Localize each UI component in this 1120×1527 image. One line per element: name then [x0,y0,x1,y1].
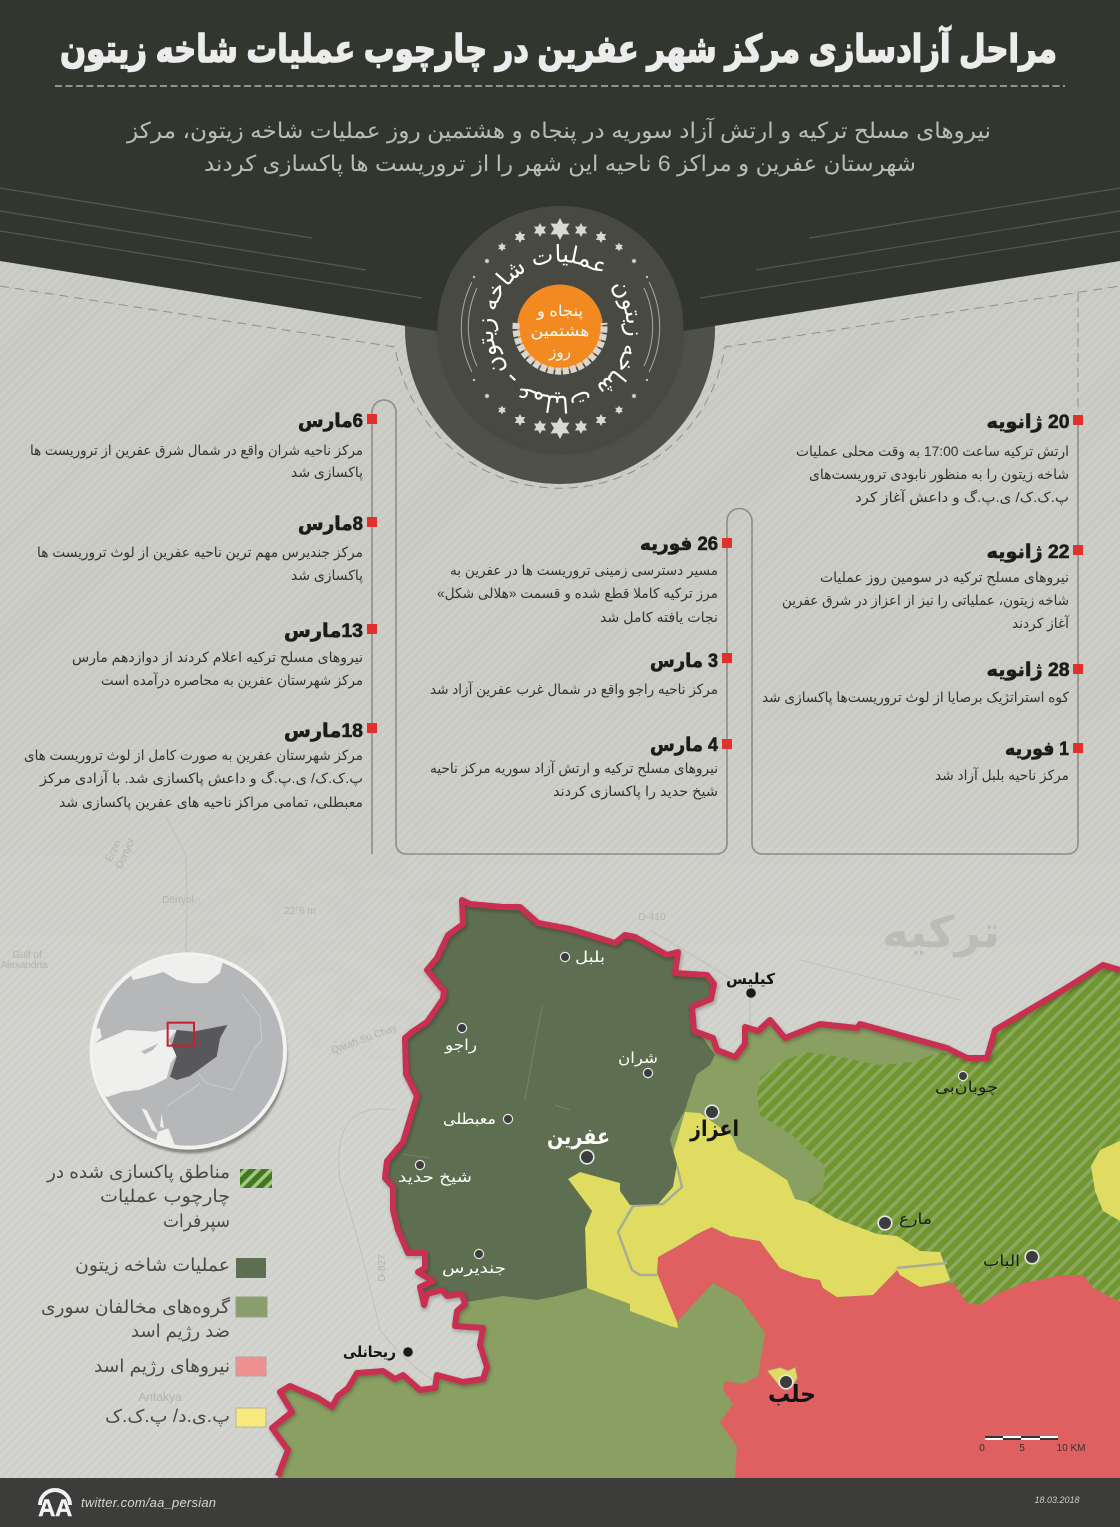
legend: YPG: پ.ی.د/ پ.ک.ک [105,1406,230,1427]
orange center text [530,303,590,361]
timeline column: right [762,412,1070,784]
faint base-map labels and roads [0,815,960,1404]
legend: olive branch [75,1255,266,1278]
footer date: 18.03.2018 [1034,1495,1080,1505]
timeline column: left: پاکسازی شد [291,567,363,584]
scale bar: 10 KM [1057,1443,1085,1454]
city labels [343,949,1020,1408]
agency logo: AA [38,1495,72,1522]
footer [0,1478,1120,1527]
timeline column: right: شاخه زیتون را به منظور نابودی تروریست‌های [809,466,1069,483]
sea mediterranean [87,1028,177,1097]
subtitle [126,117,991,177]
timeline column: right: ارتش ترکیه ساعت 17:00 به وقت محلی عملیات [796,443,1069,460]
faint base-map labels and roads: Gulf of [12,950,42,961]
timeline column: middle: شیخ حدید را پاکسازی کردند [553,783,718,800]
subtitle: نیروهای مسلح ترکیه و ارتش آزاد سوریه در پنجاه و هشتمین روز عملیات شاخه زیتون، مرکز [126,117,991,144]
city labels: بلبل [575,949,605,966]
timeline brackets [372,400,1078,854]
timeline column: left: مرکز جندیرس مهم ترین ناحیه عفرین از لوث تروریست ها [37,544,363,561]
red timeline markers [367,414,1083,753]
city labels: حلب [768,1381,816,1408]
scale bar: 0 [979,1443,985,1454]
legend: opposition: ضد رژیم اسد [131,1321,230,1342]
regime area [657,1227,1120,1478]
legend: cleared area: چارچوب عملیات [100,1186,230,1207]
subtitle: شهرستان عفرین و مراکز 6 ناحیه این شهر را از تروریست ها پاکسازی کردند [204,151,916,177]
city labels: الباب [983,1253,1020,1270]
timeline column: middle: مسیر دسترسی زمینی تروریست ها در عفرین به [450,562,718,579]
timeline column: middle: 3 مارس [650,651,718,672]
opposition area [272,900,1120,1478]
footer link: twitter.com/aa_persian [81,1495,216,1510]
faint base-map labels and roads: Qarah Su Chay [330,1023,398,1057]
timeline column: left: معبطلی، تمامی مراکز ناحیه های عفرین پاکسازی شد [59,794,363,811]
border line [272,900,1120,1476]
rivers [618,1166,947,1275]
city labels: اعزاز [689,1116,739,1142]
cleared area hatch [757,965,1120,1305]
lighter map zone [0,700,1120,1480]
Syria [170,1025,227,1080]
faint base-map labels and roads: Erzin [104,838,124,864]
city markers [403,952,1039,1389]
locator box [168,1023,194,1046]
timeline column: middle: 26 فوریه [640,534,718,555]
timeline column: left [24,411,363,811]
timeline column: right: آغاز کردند [1012,615,1070,632]
timeline column: right: 1 فوریه [1005,739,1069,760]
timeline column: right: 20 ژانویه [986,412,1070,433]
timeline column: middle: نیروهای مسلح ترکیه و ارتش آزاد سوریه مرکز ناحیه [430,760,718,777]
timeline column: left: 8مارس [298,514,363,535]
YPG enclave Aleppo [768,1368,797,1386]
Cyprus [141,1043,158,1054]
timeline column: middle: مرکز ناحیه راجو واقع در شمال غرب عفرین آزاد شد [430,681,718,698]
timeline column: left: مرکز شهرستان عفرین به صورت کامل از لوث تروریست های [24,747,363,764]
timeline column: right: شاخه زیتون، عملیاتی را نیز از اعزاز در شرق عفرین [782,592,1069,609]
dashed guide lines [0,286,1120,488]
faint base-map labels and roads: Dortyol [114,837,137,871]
city labels: جندیرس [442,1260,506,1277]
Afrin inner roads [402,1006,570,1158]
city labels: مارع [899,1211,932,1228]
badge arcs [461,282,660,372]
city labels: معبطلی [443,1111,496,1128]
title divider [55,85,1065,87]
timeline column: right: مرکز ناحیه بلبل آزاد شد [935,767,1069,784]
legend: regime: نیروهای رژیم اسد [94,1356,230,1377]
outer dark disc [405,174,715,484]
timeline column: middle: نجات یافته کامل شد [600,609,718,625]
timeline column: left: 6مارس [298,411,363,432]
orange center text: هشتمین [530,323,590,340]
timeline column: left: نیروهای مسلح ترکیه اعلام کردند از دوازدهم مارس [72,649,363,666]
country label: Turkey: ترکیه [882,908,1000,958]
timeline column: left: پ.ک.ک/ ی.پ.گ و داعش پاکسازی شد. با آزادی مرکز [39,769,363,787]
city labels: راجو [444,1037,477,1054]
timeline column: right: کوه استراتژیک برصایا از لوث تروریست‌ها پاکسازی شد [762,689,1069,706]
badge stars [473,218,648,439]
orange center text: پنجاه و [536,303,583,321]
orange center [517,284,603,370]
faint base-map labels and roads: D-410 [638,912,666,923]
timeline column: middle [430,534,718,800]
map of Afrin region [272,900,1120,1478]
city labels: شران [618,1050,658,1067]
scale bar: 5 [1019,1443,1025,1454]
border shadow [273,902,1120,1478]
timeline column: left: 13مارس [284,621,363,642]
faint base-map labels and roads: 22°6 m [284,906,316,917]
orange center text: روز [548,344,571,361]
city labels: شیخ حدید [398,1169,472,1186]
sea north [131,956,222,984]
timeline column: left: مرکز ناحیه شران واقع در شمال شرق عفرین از تروریست ها [30,442,363,459]
legend: cleared area: سپرفرات [163,1211,230,1232]
borders [167,993,262,1107]
city labels: کیلیس [726,971,775,988]
Red Sea gulfs [142,1108,174,1144]
timeline column: left: مرکز شهرستان عفرین به محاصره درآمده است [101,672,363,689]
timeline column: right: پ.ک.ک/ ی.پ.گ و داعش آغاز کرد [855,488,1069,506]
legend: cleared area [46,1162,272,1232]
badge [438,206,684,453]
timeline column: left: 18مارس [284,721,363,742]
YPG area [568,1112,950,1328]
timeline column: middle: مرز ترکیه کاملا قطع شده و قسمت «هلالی شکل» [437,585,718,602]
legend: opposition [41,1296,267,1342]
city labels: عفرین [547,1124,610,1150]
legend: opposition: گروه‌های مخالفان سوری [41,1296,230,1318]
legend: cleared area: مناطق پاکسازی شده در [46,1162,230,1183]
Afrin area [385,900,715,1305]
timeline column: left: پاکسازی شد [291,464,363,481]
city labels: ریحانلی [343,1344,396,1361]
badge circular text: عملیات شاخه زیتون ـ عملیات شاخه زیتون [482,244,638,414]
timeline column: middle: 4 مارس [650,735,718,756]
legend: olive branch: عملیات شاخه زیتون [75,1255,230,1276]
laurel [516,323,604,371]
legend [41,1162,272,1427]
scale bar [979,1436,1085,1454]
legend: YPG [105,1406,266,1427]
timeline column: right: 22 ژانویه [986,542,1070,563]
faint base-map labels and roads: Alexandria [0,960,48,971]
header band [0,0,1120,331]
timeline column: right: نیروهای مسلح ترکیه در سومین روز عملیات [820,569,1069,586]
YPG enclave east [1091,1141,1120,1221]
timeline column: right: 28 ژانویه [986,660,1070,681]
map terrain texture [30,800,470,1240]
faint base-map labels and roads: D-827 [377,1254,388,1282]
faint base-map labels and roads: Antakya [138,1390,182,1404]
city labels: چوبان‌بی [935,1079,998,1096]
faint base-map labels and roads: Dörtyol [162,895,194,906]
locator map inset [87,950,293,1157]
